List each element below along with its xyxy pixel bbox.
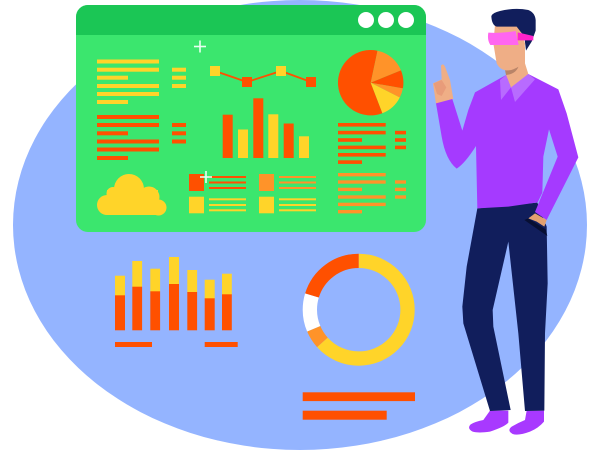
stacked bar chart (115, 257, 238, 347)
window header bar (76, 5, 426, 35)
legend list: right column (259, 174, 316, 213)
text block: right red lines (338, 123, 406, 164)
hair (491, 9, 536, 51)
raised hand (433, 64, 453, 104)
sweater (436, 74, 578, 220)
person wearing VR headset (433, 9, 578, 435)
icon: cloud (97, 174, 166, 216)
pie chart (338, 50, 403, 115)
neck shadow (505, 65, 519, 75)
panel: dashboard window (76, 5, 426, 232)
trouser pocket (524, 218, 547, 236)
trousers (462, 203, 548, 411)
socks and shoes (469, 411, 544, 435)
pocket hand (528, 213, 547, 227)
upper body (433, 9, 578, 236)
face (493, 20, 525, 70)
line chart (210, 66, 316, 87)
neck (506, 47, 528, 88)
text block: yellow lines (97, 60, 186, 104)
legend list: left column (189, 174, 246, 213)
text block: right orange lines (338, 173, 406, 213)
finger shading (434, 80, 446, 96)
bar chart: dashboard (223, 98, 309, 158)
donut chart (310, 261, 408, 359)
VR headset strap (518, 32, 533, 40)
caption bars under donut (303, 392, 415, 420)
window control dots (358, 12, 414, 28)
text block: red lines (97, 115, 186, 160)
sparkle icons (194, 40, 212, 183)
sweater collar (500, 74, 535, 102)
window body (76, 5, 426, 232)
chart legend bars (115, 342, 238, 347)
VR headset visor (488, 31, 519, 45)
legs and trousers (462, 203, 548, 435)
